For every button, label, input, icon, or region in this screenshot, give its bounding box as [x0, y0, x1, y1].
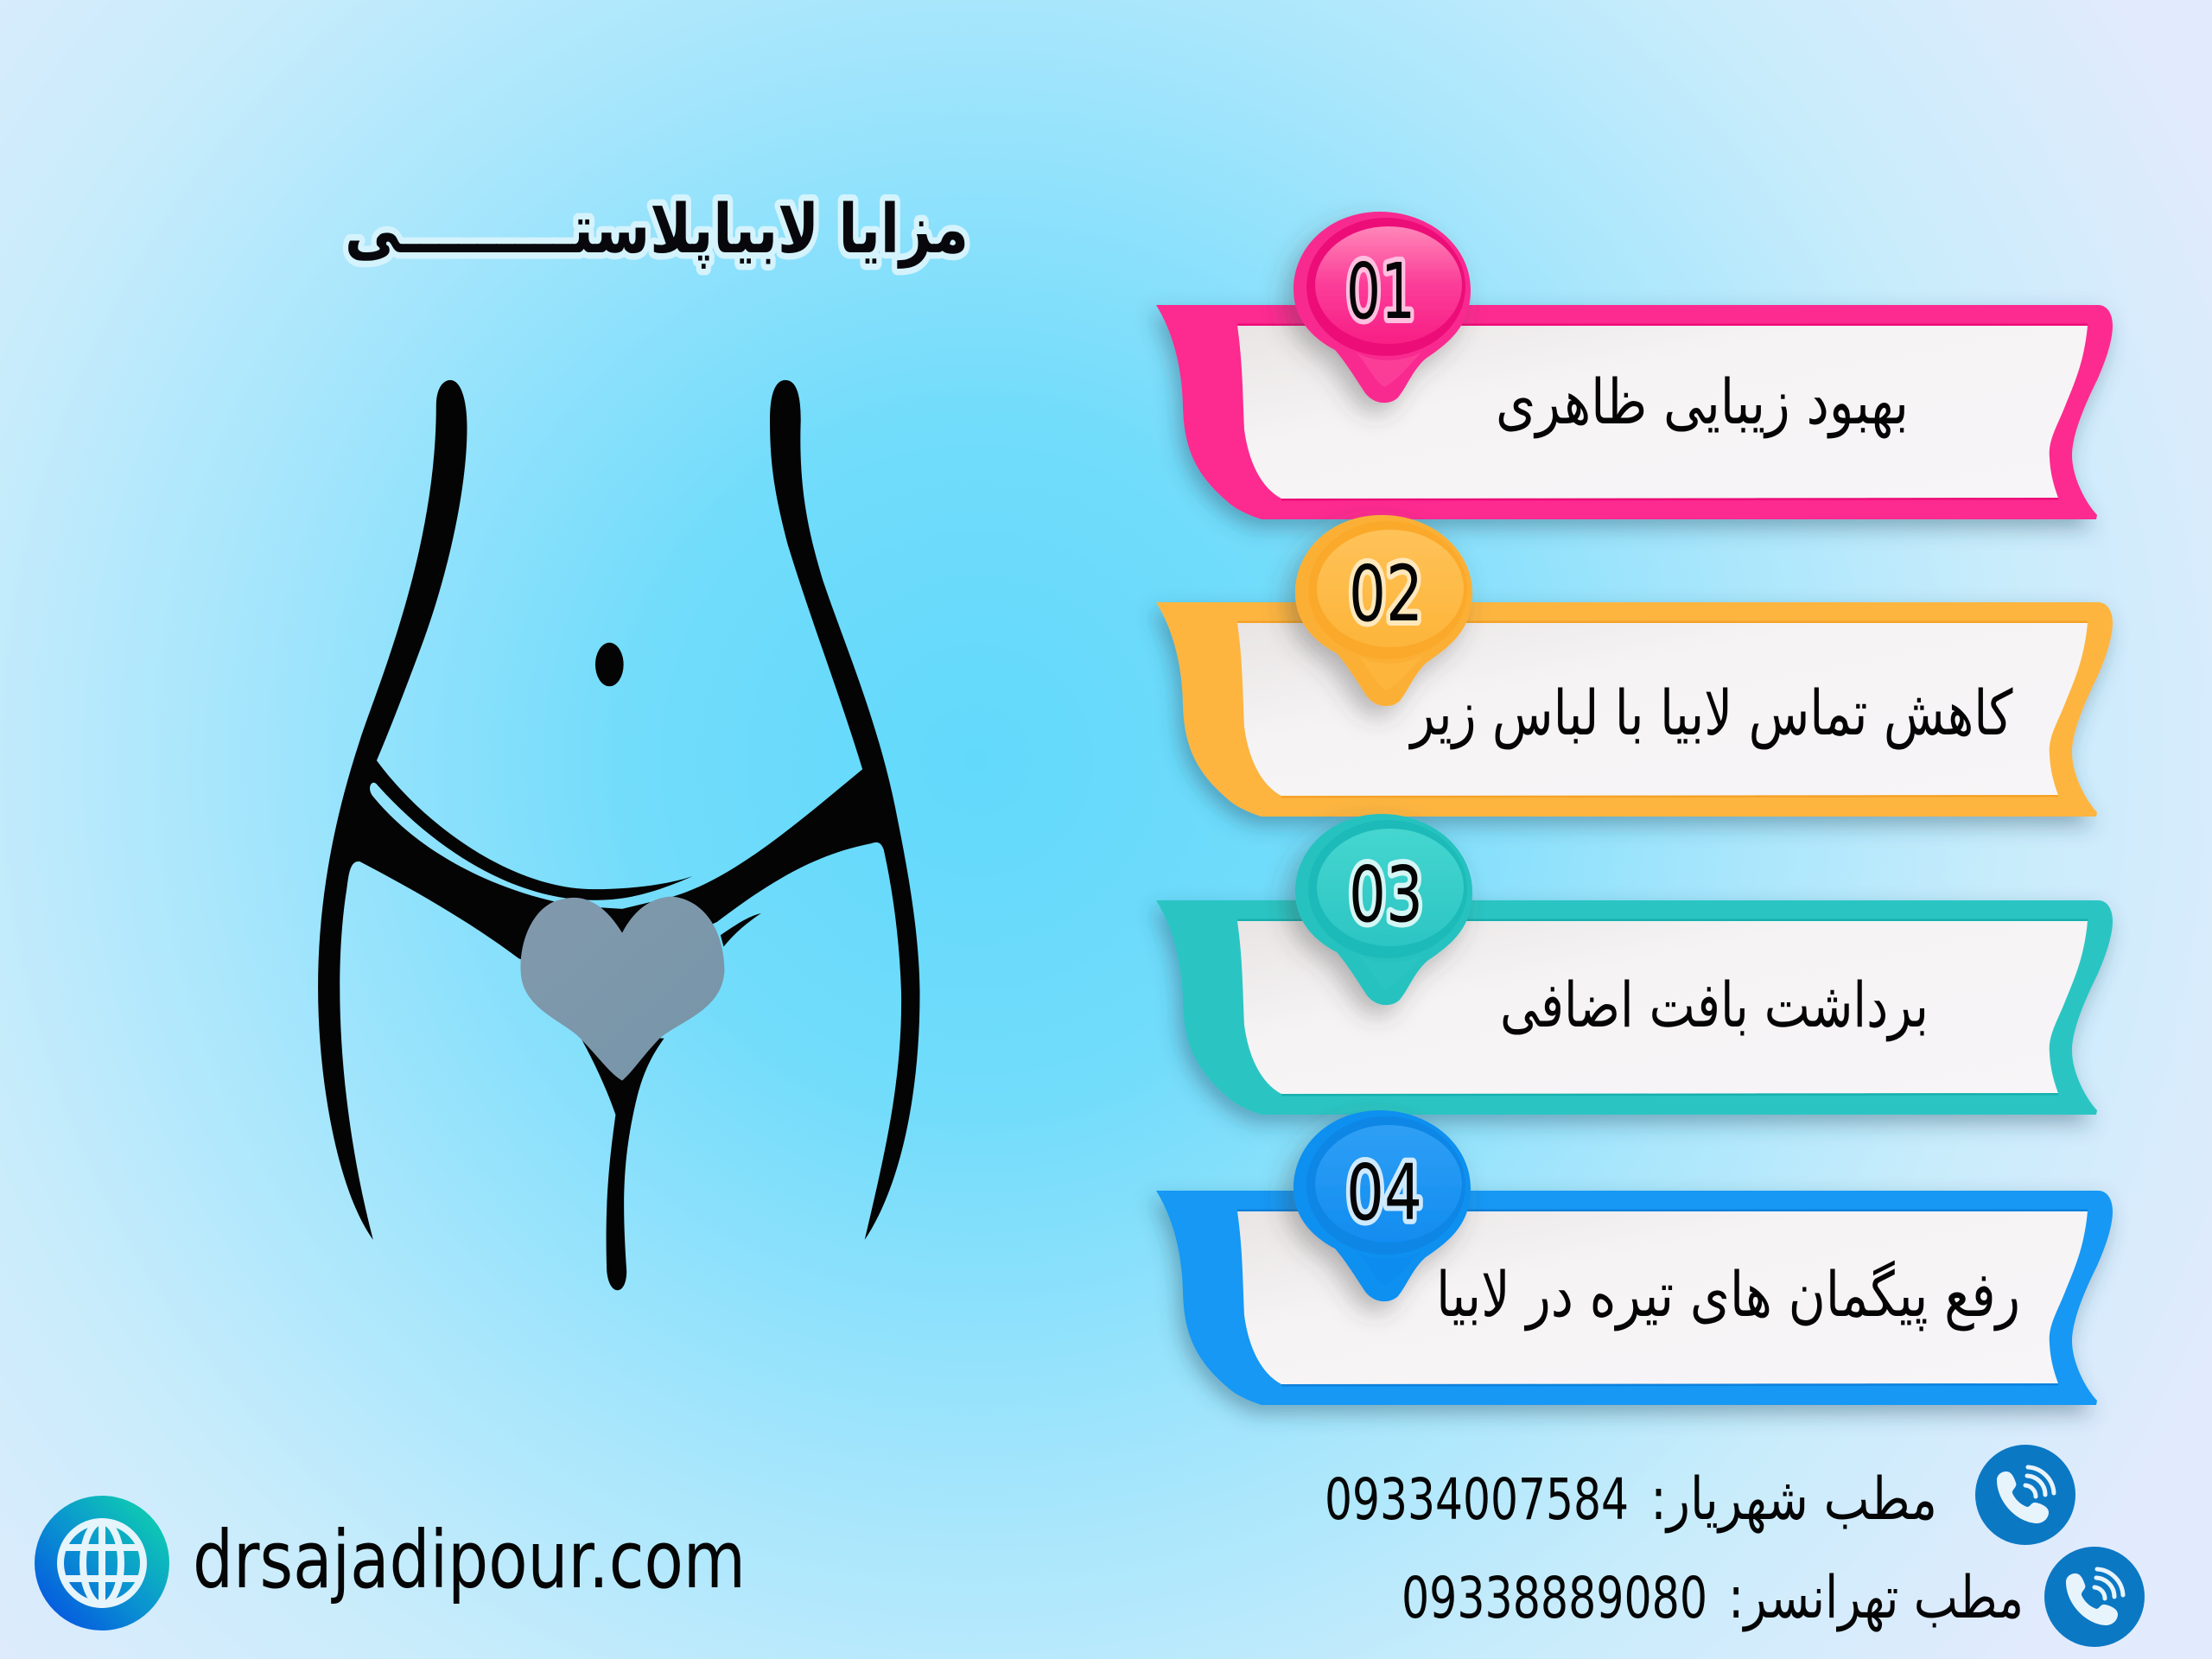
inner thigh line — [578, 1033, 664, 1290]
icon: phone 2 — [2044, 1547, 2145, 1647]
phone number 2: 09338889080 — [1402, 1565, 1707, 1631]
banner 04 — [1156, 1110, 2113, 1405]
phone number 1: 09334007584 — [1325, 1466, 1629, 1533]
frame — [1156, 602, 2113, 817]
number 03: 03 — [1349, 849, 1423, 939]
clinic name 2: مطب تهرانسر: — [1728, 1564, 2024, 1632]
number 02: 02 — [1349, 549, 1423, 639]
pin — [1294, 1110, 1471, 1301]
label 02: کاهش تماس لابیا با لباس زیر — [1408, 677, 2013, 750]
label 01: بهبود زیبایی ظاهری — [1496, 365, 1909, 439]
phone line 2 — [1402, 1564, 2024, 1632]
pin — [1295, 814, 1472, 1005]
left body curve — [318, 380, 693, 1240]
frame — [1156, 900, 2113, 1115]
phone line 1 — [1325, 1465, 1937, 1534]
icon: globe — [35, 1496, 169, 1630]
illustration: body silhouette — [318, 380, 919, 1290]
label 03: برداشت بافت اضافی — [1500, 969, 1929, 1042]
number 04: 04 — [1346, 1147, 1422, 1237]
pin — [1295, 515, 1472, 706]
right body curve — [669, 380, 919, 1240]
pin — [1294, 212, 1471, 403]
navel — [595, 643, 624, 686]
banner 03 — [1156, 814, 2113, 1115]
number 01: 01 — [1346, 246, 1415, 336]
frame — [1156, 305, 2113, 519]
label 04: رفع پیگمان های تیره در لابیا — [1436, 1258, 2020, 1332]
small right strand — [721, 913, 761, 947]
title: مزایا لابیاپلاستـــــــــی — [345, 191, 969, 269]
frame — [1156, 1191, 2113, 1405]
website: drsajadipour.com — [193, 1514, 746, 1606]
banner 02 — [1156, 515, 2113, 817]
grey heart — [520, 897, 724, 1081]
banner 01 — [1156, 212, 2113, 519]
icon: phone 1 — [1975, 1445, 2075, 1545]
clinic name 1: مطب شهریار: — [1650, 1465, 1937, 1534]
